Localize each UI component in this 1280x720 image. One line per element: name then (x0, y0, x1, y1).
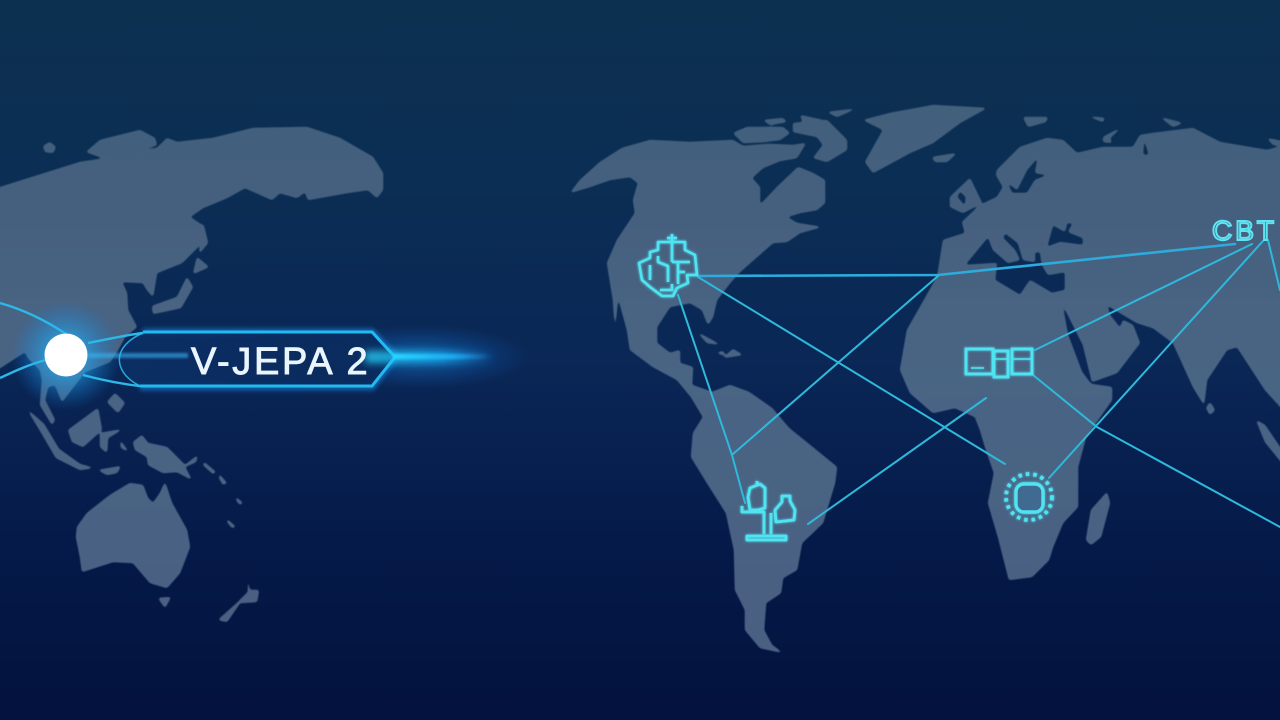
line: South America to Eurasia (733, 276, 938, 454)
icon: scale with bottles (742, 481, 795, 540)
glow: horizontal beam inside pill (88, 353, 188, 358)
pill left curve (119, 333, 143, 386)
line: brain to CBT across Atlantic (698, 244, 1235, 276)
line: scale to Africa (808, 398, 986, 524)
landmass: North America (570, 140, 825, 417)
islands: Canadian Arctic (733, 103, 903, 162)
islands: Tasmania and New Zealand (158, 575, 259, 622)
line: books to CBT (1035, 244, 1252, 350)
islands: New Guinea and Melanesia (133, 435, 243, 528)
glow: halo around node (11, 300, 121, 410)
node: white circle (44, 334, 88, 376)
icon: microchip (1006, 474, 1052, 520)
landmass: northeast Asia (0, 127, 383, 425)
glow: flare beam blur (365, 351, 495, 363)
text: V-JEPA 2: V-JEPA 2 (191, 341, 370, 383)
icon: books (966, 349, 1032, 377)
node beams (0, 303, 143, 386)
landmass: Australia (76, 482, 190, 588)
islands: Iceland, Britain, Madagascar, Sri Lanka, Sumatra and arctic (932, 116, 1280, 545)
line: chip to CBT (1049, 241, 1263, 478)
landmass: Eurasia and Africa (900, 128, 1280, 580)
line: CBT to India (1268, 240, 1280, 290)
right map: Americas, Europe, Africa and Asia (570, 103, 1280, 653)
islands: Southeast Asia (27, 393, 129, 475)
connection lines between icons (678, 240, 1280, 527)
landmass: South America (691, 385, 837, 653)
glow: flare beam core (393, 354, 493, 359)
line: brain to scale (678, 295, 745, 503)
pill outline (140, 332, 395, 386)
line: brain to southern Africa (698, 277, 1005, 464)
landmass: Greenland (863, 105, 987, 173)
islands: arctic and Japan (43, 130, 209, 314)
label: CBT: CBT (1212, 215, 1277, 246)
line: books to Indian Ocean (1033, 375, 1280, 527)
glow: flare halo (310, 325, 530, 389)
panel: pill body (119, 332, 395, 386)
glow: pill outer (140, 332, 395, 387)
icon: brain (639, 234, 697, 296)
callout: glowing V-JEPA 2 label (0, 300, 530, 410)
left map: East Asia and Oceania (0, 127, 383, 622)
islands: Caribbean (697, 332, 743, 358)
